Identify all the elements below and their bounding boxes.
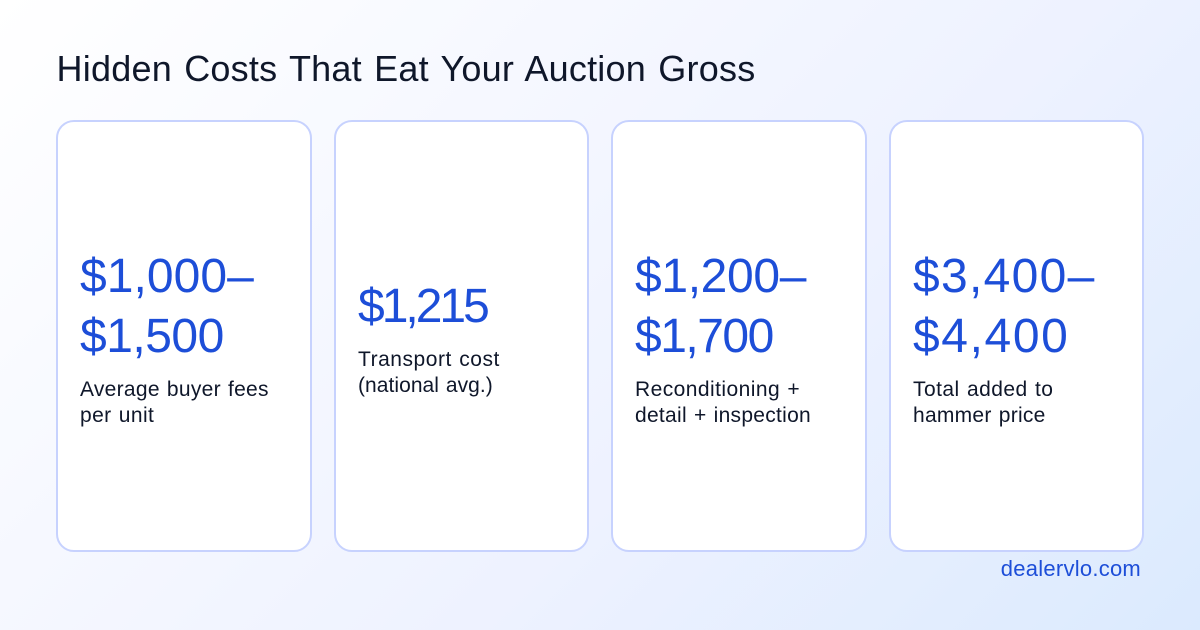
stat: buyer fees range (80, 250, 254, 363)
panel: transport (334, 120, 589, 552)
stat: reconditioning range (635, 250, 806, 363)
title: Hidden Costs That Eat Your Auction Gross (56, 48, 755, 89)
label: transport (358, 348, 500, 397)
label: buyer fees: per unit (80, 404, 154, 427)
stat: total range: $3,400– (913, 250, 1096, 303)
stat: transport cost: $1,215 (358, 280, 487, 333)
stat: buyer fees range: $1,000– (80, 250, 254, 303)
stat: buyer fees range: $1,500 (80, 310, 224, 363)
panel: total (889, 120, 1144, 552)
brand url: dealervlo.com (1001, 556, 1141, 581)
label: reconditioning: detail + inspection (635, 404, 811, 427)
stat: total range (913, 250, 1096, 363)
label: transport: Transport cost (358, 348, 500, 371)
label: total (913, 378, 1053, 427)
label: total: Total added to (913, 378, 1053, 401)
stat: reconditioning range: $1,200– (635, 250, 806, 303)
label: transport: (national avg.) (358, 374, 493, 397)
label: total: hammer price (913, 404, 1046, 427)
stat: total range: $4,400 (913, 310, 1069, 363)
panel: reconditioning (611, 120, 867, 552)
stat: reconditioning range: $1,700 (635, 310, 773, 363)
label: reconditioning (635, 378, 811, 427)
label: buyer fees (80, 378, 269, 427)
label: reconditioning: Reconditioning + (635, 378, 800, 401)
label: buyer fees: Average buyer fees (80, 378, 269, 401)
panel: buyer fees (56, 120, 312, 552)
